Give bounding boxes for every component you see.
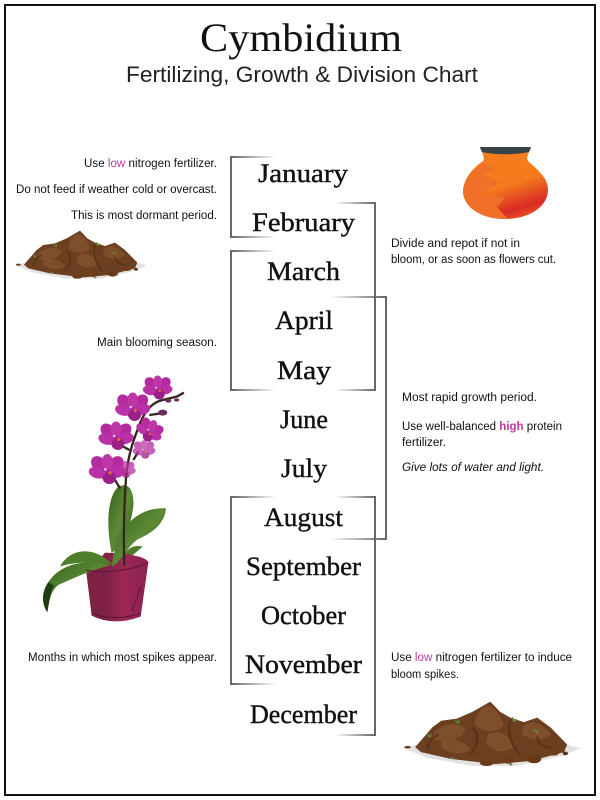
text block: induce bloom spikes: Use low nitrogen fertilizer to induce	[391, 652, 572, 664]
text block: divide and repot: Divide and repot if not in	[391, 238, 520, 250]
bracket: March to May	[231, 251, 276, 390]
month: April: April	[275, 306, 333, 335]
text: months with spikes: Months in which most spikes appear.	[28, 652, 217, 664]
text: main blooming season: Main blooming season.	[97, 337, 217, 349]
month: February: February	[252, 208, 355, 237]
month: May: May	[277, 356, 331, 385]
text block: rapid growth period: Give lots of water and light.	[402, 462, 544, 474]
bracket: January to February	[231, 157, 276, 237]
month: December: December	[250, 700, 357, 729]
text block: rapid growth period: fertilizer.	[402, 437, 446, 449]
orchid back leaves	[108, 485, 143, 562]
text block: divide and repot	[391, 238, 556, 266]
month list	[245, 159, 362, 729]
text block: dormant period notes: Do not feed if weather cold or overcast.	[16, 184, 217, 196]
orchid pot	[86, 553, 148, 621]
month: September: September	[246, 552, 361, 581]
month: August: August	[264, 503, 344, 532]
text block: dormant period notes: Use low nitrogen fertilizer.	[84, 158, 217, 170]
bracket: February to May	[335, 203, 375, 390]
orchid front leaves	[43, 508, 166, 612]
icon: soil pile lower right	[402, 702, 581, 766]
subtitle: Fertilizing, Growth & Division Chart	[126, 62, 478, 87]
orchid stem	[115, 393, 184, 566]
bracket: April to August	[330, 297, 386, 539]
text block: induce bloom spikes: bloom spikes.	[391, 669, 459, 681]
month: March: March	[267, 257, 340, 286]
month: November: November	[245, 650, 362, 679]
text block: dormant period notes	[16, 158, 217, 222]
month: June: June	[280, 405, 328, 434]
title: Cymbidium	[200, 15, 402, 60]
orchid buds	[158, 398, 179, 416]
icon: potted orchid	[43, 375, 184, 621]
month: October: October	[261, 601, 346, 630]
bracket: August to November	[231, 497, 276, 684]
orchid flowers	[87, 375, 174, 484]
icon: soil pile upper left	[14, 231, 147, 279]
month: July: July	[281, 454, 327, 483]
text block: rapid growth period	[402, 392, 562, 474]
text block: dormant period notes: This is most dormant period.	[71, 210, 217, 222]
bracket: August to December	[335, 497, 375, 735]
month: January: January	[258, 159, 348, 188]
pot rim and decoration	[86, 562, 148, 618]
text block: divide and repot: bloom, or as soon as flowers cut.	[391, 254, 556, 266]
text block: induce bloom spikes	[391, 652, 572, 681]
text block: rapid growth period: Use well-balanced high protein	[402, 421, 562, 433]
text block: rapid growth period: Most rapid growth period.	[402, 392, 537, 404]
icon: orange clay pot	[463, 147, 548, 219]
